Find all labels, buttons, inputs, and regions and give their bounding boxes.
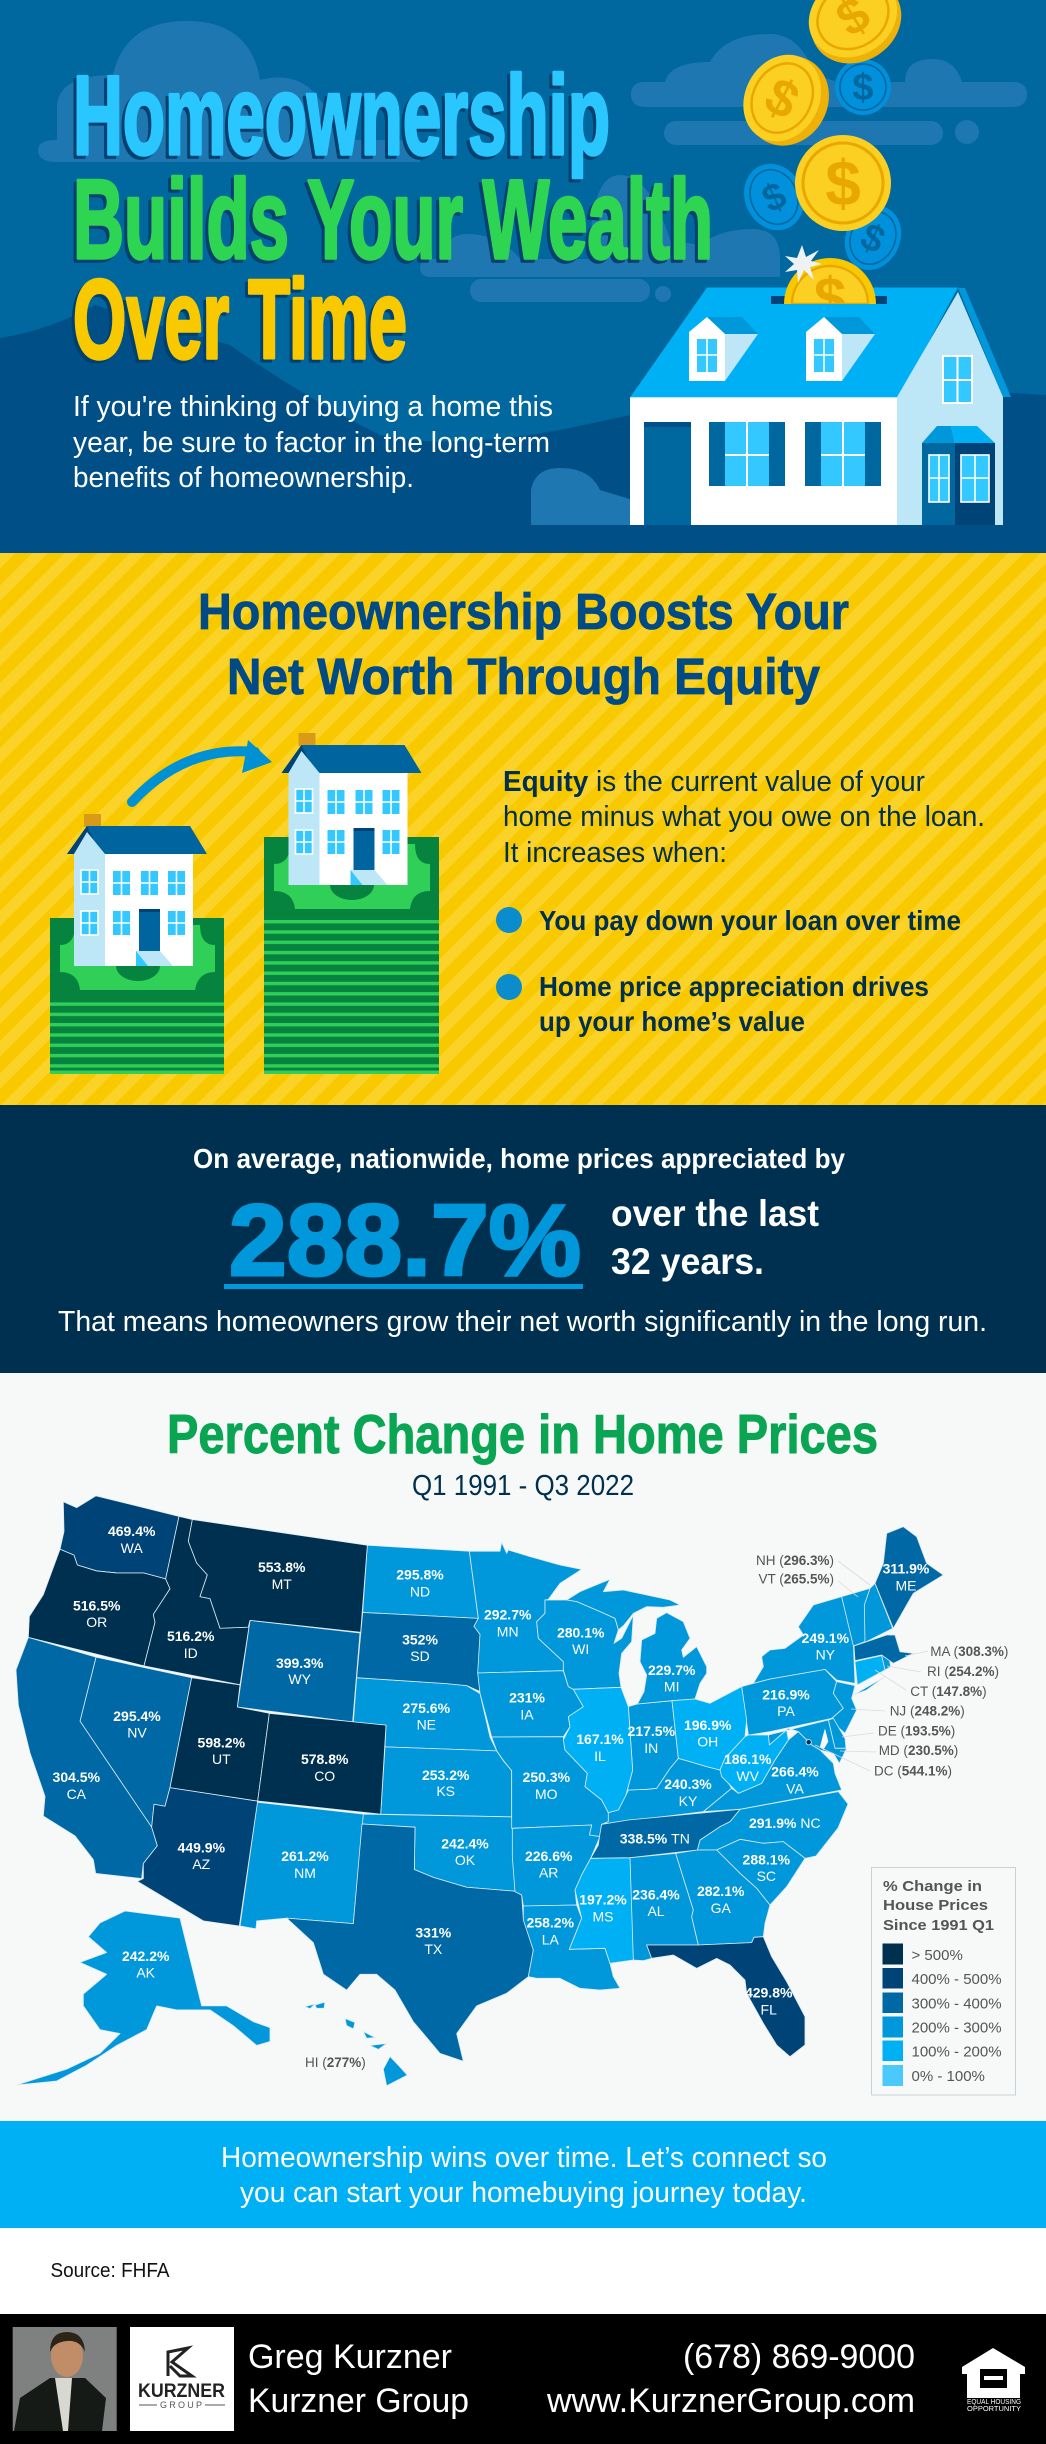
equity heading: Homeownership Boosts Your — [198, 583, 849, 640]
gold coins — [792, 0, 917, 80]
coins falling into the house: $ — [854, 215, 891, 262]
state values — [53, 1523, 930, 2018]
legend — [872, 1868, 1016, 2095]
company logo: GROUP — [160, 2400, 202, 2410]
source note — [0, 2228, 1046, 2314]
map subheading: Q1 1991 - Q3 2022 — [412, 1470, 634, 1502]
state values: 288.1% — [743, 1852, 791, 1868]
state values: WI — [572, 1641, 589, 1657]
icon: equal housing: EQUAL HOUSING — [967, 2397, 1021, 2406]
equity definition: home minus what you owe on the loan. — [503, 801, 985, 833]
state values: 429.8% — [745, 1984, 793, 2000]
coin dropping into slot: $ — [814, 266, 846, 331]
state values: MN — [497, 1624, 519, 1640]
agent name: Greg Kurzner — [248, 2338, 452, 2376]
coins falling into the house: $ — [852, 67, 874, 109]
state values: LA — [542, 1932, 560, 1948]
agent name: Kurzner Group — [248, 2382, 469, 2420]
state values: WA — [121, 1540, 143, 1556]
state values: IN — [644, 1740, 658, 1756]
state values: SC — [757, 1868, 776, 1884]
bullet list: You pay down your loan over time — [539, 905, 961, 936]
state values: 242.2% — [122, 1948, 170, 1964]
source note: Source: FHFA — [50, 2260, 170, 2282]
state values: 253.2% — [422, 1767, 470, 1783]
bullet list: Home price appreciation drives — [539, 971, 929, 1002]
state values: IA — [520, 1706, 534, 1722]
state values: 216.9% — [762, 1686, 810, 1702]
choropleth map: central and eastern states — [469, 1527, 943, 2057]
state values: 291.9% NC — [749, 1815, 821, 1831]
state values: 217.5% — [628, 1723, 676, 1739]
background hill — [0, 305, 1046, 553]
company logo: KURZNER — [138, 2381, 225, 2402]
bullet list — [496, 905, 961, 1037]
panel: hero — [0, 0, 1046, 553]
state values: 266.4% — [771, 1764, 819, 1780]
state values: SD — [410, 1648, 430, 1664]
title: Homeownership — [73, 53, 610, 178]
state values: 280.1% — [557, 1624, 605, 1640]
background clouds — [38, 21, 1027, 525]
panel: call to action: Homeownership wins over time. Let’s connect so — [221, 2142, 827, 2174]
state values: AL — [647, 1903, 665, 1919]
legend: 300% - 400% — [912, 1996, 1002, 2012]
state values: 282.1% — [697, 1883, 745, 1899]
state values: 231% — [509, 1690, 545, 1706]
legend: Since 1991 Q1 — [883, 1917, 994, 1934]
title — [73, 53, 713, 382]
state values: 197.2% — [579, 1892, 627, 1908]
equity heading: Net Worth Through Equity — [227, 648, 821, 705]
state values: NY — [816, 1646, 836, 1662]
state values: 449.9% — [178, 1840, 226, 1856]
state values: 578.8% — [301, 1751, 349, 1767]
coins falling into the house — [728, 0, 917, 279]
title: Over Time — [73, 257, 407, 382]
statistic period: 32 years. — [611, 1241, 764, 1282]
house — [630, 245, 1011, 525]
state values: IL — [594, 1748, 606, 1764]
state values: 311.9% — [883, 1560, 930, 1576]
state values: 295.8% — [396, 1566, 444, 1582]
intro text: year, be sure to factor in the long-term — [73, 427, 550, 459]
legend: 200% - 300% — [912, 2020, 1002, 2036]
legend: 100% - 200% — [912, 2044, 1002, 2060]
small-state callout labels: HI (277%) — [305, 2055, 366, 2070]
state values: 331% — [415, 1924, 452, 1940]
state values: 292.7% — [484, 1606, 532, 1622]
state values: AZ — [192, 1856, 211, 1872]
small-state callout labels: DE (193.5%) — [878, 1724, 955, 1738]
icon: houses on money stacks — [50, 733, 439, 1074]
contact details: (678) 869-9000 — [683, 2338, 915, 2376]
state values: WY — [288, 1671, 312, 1687]
coins falling into the house: $ — [825, 147, 861, 219]
state values: 516.5% — [73, 1598, 121, 1614]
agent name — [248, 2338, 469, 2420]
statistic period: over the last — [611, 1193, 819, 1234]
intro text — [73, 391, 553, 494]
state values: CA — [67, 1786, 87, 1802]
state values: AR — [539, 1864, 558, 1880]
icon: equal housing: OPPORTUNITY — [967, 2404, 1021, 2413]
small-state callout labels: CT (147.8%) — [910, 1684, 987, 1699]
small-state callout labels: MD (230.5%) — [879, 1743, 958, 1758]
state values: ME — [896, 1578, 916, 1594]
contact details — [546, 2338, 915, 2420]
state values: 516.2% — [167, 1628, 215, 1644]
leader lines — [815, 1561, 928, 1771]
small-state callout labels: NH (296.3%) — [756, 1553, 834, 1568]
state values: 352% — [402, 1632, 438, 1648]
state values: KY — [679, 1793, 698, 1809]
state values: 258.2% — [527, 1914, 575, 1930]
state values: NM — [294, 1865, 316, 1881]
coin dropping into slot — [784, 258, 876, 331]
state values: 553.8% — [258, 1559, 306, 1575]
legend: > 500% — [912, 1947, 963, 1964]
intro text: benefits of homeownership. — [73, 462, 414, 494]
coins falling into the house: $ — [755, 67, 808, 131]
arrow — [132, 740, 272, 802]
small-state callout labels: MA (308.3%) — [930, 1644, 1008, 1659]
state values: OR — [86, 1614, 107, 1630]
state values: 250.3% — [523, 1769, 571, 1785]
state values: NE — [417, 1716, 436, 1732]
statistic conclusion: That means homeowners grow their net worth significantly in the long run. — [58, 1306, 987, 1338]
panel: map — [0, 1373, 1046, 2121]
state values: MI — [664, 1678, 679, 1694]
blue coins — [733, 59, 911, 279]
state values: VA — [786, 1780, 804, 1796]
legend: House Prices — [883, 1897, 988, 1914]
right stack — [264, 837, 439, 1074]
state values: 240.3% — [664, 1776, 712, 1792]
map heading: Percent Change in Home Prices — [167, 1403, 878, 1465]
state values: OH — [697, 1734, 718, 1750]
state values: 338.5% TN — [620, 1830, 690, 1846]
sparkle — [785, 245, 822, 283]
state values: OK — [455, 1852, 476, 1868]
coins falling into the house: $ — [756, 174, 793, 221]
state values: WV — [736, 1768, 760, 1784]
small-state callout labels — [305, 1553, 1008, 2070]
intro text: If you're thinking of buying a home this — [73, 391, 553, 423]
state values: KS — [436, 1783, 455, 1799]
state values: MO — [535, 1786, 558, 1802]
state values: 186.1% — [724, 1751, 772, 1767]
state values: 275.6% — [403, 1700, 451, 1716]
state values: AK — [136, 1964, 156, 1980]
big number: 288.7% — [229, 1185, 581, 1297]
panel: equity — [0, 553, 1046, 1105]
state values: 261.2% — [281, 1848, 329, 1864]
state values: 229.7% — [648, 1662, 696, 1678]
state values: ID — [184, 1645, 198, 1661]
state values: 242.4% — [441, 1836, 489, 1852]
icon: equal housing — [962, 2348, 1025, 2413]
equity heading — [198, 583, 849, 705]
state values: CO — [314, 1768, 335, 1784]
state values: 469.4% — [108, 1523, 156, 1539]
panel: agent footer — [0, 2314, 1046, 2444]
legend: 0% - 100% — [912, 2068, 985, 2085]
small-state callout labels: RI (254.2%) — [927, 1664, 999, 1679]
state values: 226.6% — [525, 1848, 573, 1864]
left stack — [50, 918, 224, 1074]
legend: % Change in — [883, 1878, 982, 1895]
state values: GA — [711, 1900, 731, 1916]
state values: FL — [761, 2002, 777, 2018]
small-state callout labels: VT (265.5%) — [758, 1572, 834, 1586]
panel: nationwide statistic — [0, 1105, 1046, 1373]
small-state callout labels: DC (544.1%) — [874, 1764, 952, 1778]
legend: 400% - 500% — [912, 1971, 1002, 1988]
state values: MS — [592, 1908, 614, 1924]
state values: 236.4% — [632, 1886, 680, 1902]
bullet list: up your home’s value — [539, 1006, 805, 1037]
contact details: www.KurznerGroup.com — [546, 2382, 915, 2420]
state values: NV — [127, 1724, 147, 1740]
state values: 304.5% — [53, 1769, 101, 1785]
agent portrait — [13, 2327, 117, 2431]
choropleth map: western states — [16, 1496, 533, 2086]
state values: 249.1% — [802, 1630, 850, 1646]
statistic lead-in: On average, nationwide, home prices appreciated by — [193, 1143, 845, 1174]
equity definition: It increases when: — [503, 837, 727, 869]
state values: 295.4% — [113, 1708, 161, 1724]
state values: UT — [212, 1751, 231, 1767]
state values: PA — [777, 1703, 795, 1719]
panel: call to action — [0, 2121, 1046, 2228]
state values: 598.2% — [198, 1734, 246, 1750]
state values: MT — [272, 1576, 292, 1592]
panel: call to action: you can start your homebuying journey today. — [240, 2177, 807, 2209]
equity definition — [503, 766, 985, 869]
state values: ND — [410, 1584, 430, 1600]
statistic period — [611, 1193, 819, 1282]
state values: 399.3% — [276, 1655, 324, 1671]
state values: 167.1% — [576, 1731, 624, 1747]
company logo — [130, 2327, 234, 2431]
state values: 196.9% — [684, 1717, 732, 1733]
equity definition: Equity is the current value of your — [503, 766, 925, 798]
small-state callout labels: NJ (248.2%) — [890, 1704, 965, 1718]
state values: TX — [424, 1941, 443, 1957]
